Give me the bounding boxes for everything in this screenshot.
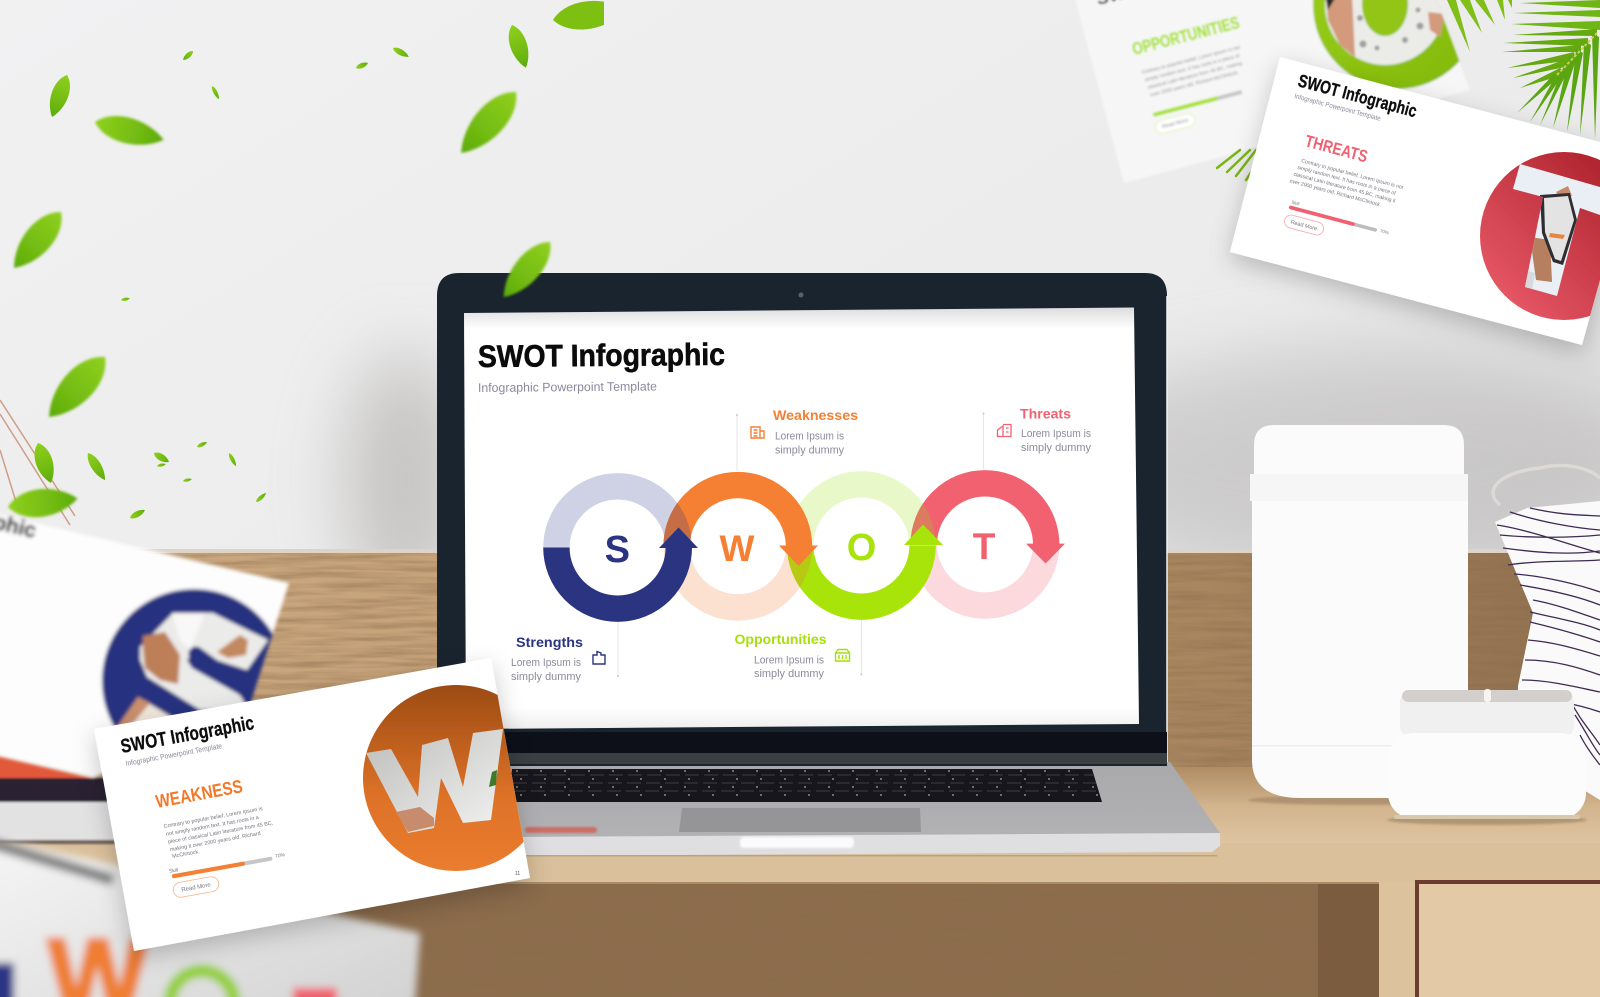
leaf: clipped at top [553, 0, 604, 30]
letter T photo [1513, 164, 1600, 296]
card skill bar [1152, 90, 1243, 117]
block: Strengths: Strengths [516, 635, 583, 650]
card read more button [172, 876, 220, 898]
block: Weaknesses: simply dummy [775, 445, 844, 457]
card page number: 11 [515, 871, 520, 877]
card skill bar: 70% [1379, 228, 1389, 235]
block: Strengths: simply dummy [511, 671, 581, 683]
card skill bar [169, 848, 286, 879]
arrowhead S [659, 528, 698, 548]
letter S: S [605, 529, 630, 571]
icon: strengths box [593, 652, 605, 664]
letter O: O [847, 527, 876, 569]
desk: top surface and drawers [0, 767, 1600, 997]
decor: rose gold wire frame [0, 400, 75, 525]
orange circle [363, 685, 524, 871]
card title: SWOT Infographic [1296, 71, 1419, 121]
card: weakness slide [94, 658, 549, 951]
card body text: over 2000 years old. Richard McClintock. [1289, 178, 1382, 208]
desk: wooden backboard [0, 549, 1600, 777]
blurred card: opportunities slide [1070, 0, 1481, 183]
card skill bar: Skill [169, 867, 179, 875]
letter T: T [973, 526, 996, 567]
block: Weaknesses: Weaknesses [773, 408, 858, 423]
card body text: Contrary to popular belief, Lorem Ipsum is [163, 806, 263, 830]
card body text: Contrary to popular belief, Lorem Ipsum is not [1300, 158, 1404, 191]
icon: opportunities bank [836, 650, 850, 661]
slide title: SWOT Infographic [478, 337, 725, 374]
palm leaves top right [1217, 0, 1600, 180]
card skill bar: 70% [275, 852, 286, 860]
card body text: piece of classical Latin literature from 45 BC, [168, 820, 274, 845]
laptop base [495, 762, 1220, 856]
card skill bar: Skill [1291, 200, 1300, 206]
laptop keyboard [508, 769, 1102, 802]
card body text: Contrary to popular belief, Lorem Ipsum is not [1141, 45, 1241, 76]
blurred card: strengths slide [0, 510, 289, 778]
red circle [1480, 152, 1600, 320]
card heading: WEAKNESS [154, 775, 244, 812]
card read more button [1154, 112, 1196, 135]
letter W: W [720, 528, 755, 569]
card body text: over 2000 years old. Richard McClintock. [1150, 70, 1240, 98]
card body text: simply random text. It has roots in a piece of [1144, 53, 1241, 83]
block: Strengths [511, 635, 583, 683]
card: threats slide [1230, 57, 1600, 345]
card body text: simply random text. It has roots in a piece of [1297, 165, 1397, 197]
arrowhead W [779, 546, 818, 566]
slide subtitle: Infographic Powerpoint Template [478, 379, 657, 395]
laptop [437, 273, 1220, 856]
block: Threats: simply dummy [1021, 442, 1091, 454]
SWOT chain of rings [556, 483, 1046, 609]
object: large white jar [1248, 425, 1472, 805]
ring O: green arc [800, 546, 923, 607]
leaves: large blurred leaves [3, 82, 560, 521]
block: Opportunities: simply dummy [754, 668, 824, 680]
connector lines [617, 412, 984, 677]
card body text [1289, 157, 1404, 213]
laptop trackpad [679, 808, 921, 832]
card heading: OPPORTUNITIES [1130, 13, 1241, 59]
icon: threats house [998, 424, 1011, 436]
card read more button: Read More [1161, 118, 1189, 130]
arrowhead T [1026, 544, 1065, 564]
ring: light halves [556, 484, 1046, 608]
card skill bar [1288, 199, 1391, 235]
card body text: making it over 2000 years old. Richard [170, 831, 261, 853]
letter W photo [366, 729, 503, 833]
ring S: navy arc [556, 548, 679, 609]
ring W: orange arc [677, 485, 799, 546]
block: Strengths: Lorem Ipsum is [511, 657, 581, 669]
card body text [1141, 45, 1247, 99]
block: Weaknesses: Lorem Ipsum is [775, 430, 844, 442]
S circle [100, 586, 275, 726]
card body text: McClintock. [172, 849, 200, 860]
block: Threats: Threats [1020, 406, 1071, 422]
card heading: THREATS [1303, 132, 1370, 166]
block: Opportunities [734, 632, 826, 680]
card title: SWOT Infographic [119, 712, 256, 758]
ring T: red arc [924, 483, 1046, 544]
icon: weaknesses building [751, 427, 764, 438]
laptop sticker [525, 827, 597, 833]
card read more button: Read More [1290, 220, 1318, 232]
green circle [1312, 0, 1460, 90]
blurred card: bottom overview slide [0, 835, 420, 997]
book and laptop behind cards at left [0, 753, 130, 844]
card read more button: Read More [181, 882, 212, 894]
block: Threats [1020, 406, 1091, 454]
block: Opportunities: Opportunities [734, 632, 826, 647]
object: striped cloth bag [1493, 465, 1600, 800]
card body text: classical Latin literature from 45 BC, making it [1293, 172, 1397, 205]
leaves: sharp small leaves [30, 22, 534, 521]
laptop bezel [437, 273, 1167, 766]
card body text [163, 805, 277, 860]
card subtitle: Infographic Powerpoint Template [125, 741, 223, 768]
card subtitle: Infographic Powerpoint Template [1293, 93, 1381, 123]
block: Threats: Lorem Ipsum is [1021, 428, 1091, 440]
laptop screen: main SWOT slide [464, 308, 1139, 729]
object: glass candle jar [1387, 689, 1587, 825]
card read more button [1283, 214, 1325, 236]
card body text: classical Latin literature from 45 BC, making [1147, 61, 1243, 91]
arrowhead O [904, 524, 943, 545]
block: Opportunities: Lorem Ipsum is [754, 654, 824, 666]
card body text: not simply random text. It has roots in a [166, 815, 259, 838]
block: Weaknesses [773, 408, 858, 457]
